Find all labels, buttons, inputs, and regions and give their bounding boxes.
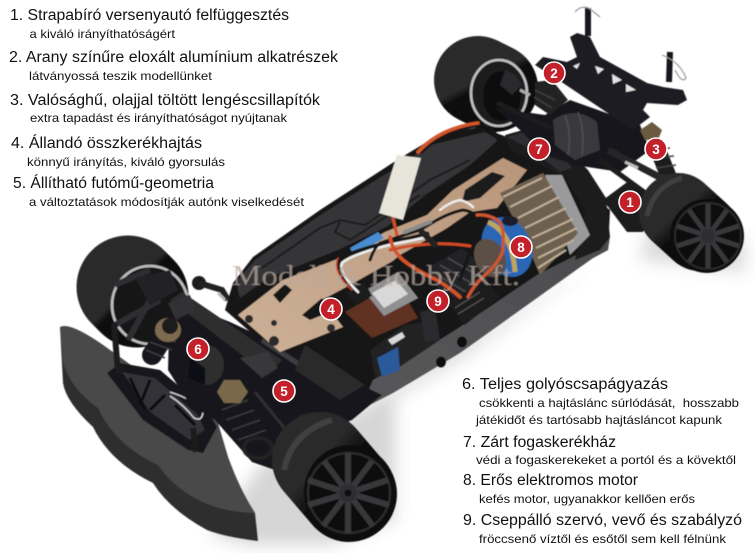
- front suspension assembly: [168, 276, 382, 470]
- front foam bumper: [60, 326, 258, 541]
- feature list: right: [462, 376, 742, 546]
- badge 1: [619, 191, 641, 213]
- front bumper mount plate: [107, 323, 217, 453]
- feature 3: [10, 92, 320, 125]
- feature 7: [463, 434, 736, 467]
- feature 5: 5. Állítható futómű-geometria: [13, 175, 214, 192]
- callout badges: [187, 62, 667, 402]
- feature 4: [11, 135, 225, 169]
- feature 5: [13, 175, 305, 209]
- feature 6: csökkenti a hajtáslánc súrlódását, hosszabb: [479, 397, 739, 410]
- badge 2: 2: [550, 66, 558, 81]
- badge 6: [187, 338, 209, 360]
- badge 2: [543, 62, 565, 84]
- feature 1: [10, 7, 289, 41]
- watermark: Modell & Hobby Kft.: [232, 261, 520, 292]
- feature 8: 8. Erős elektromos motor: [463, 472, 638, 489]
- copper top plate: [238, 158, 527, 352]
- badge 8: 8: [517, 240, 525, 255]
- feature 6: [462, 376, 739, 427]
- feature 4: 4. Állandó összkerékhajtás: [11, 135, 202, 152]
- feature 7: 7. Zárt fogaskerékház: [463, 434, 616, 451]
- feature 6: játékidőt és tartósabb hajtásláncot kapunk: [475, 414, 722, 427]
- rear shock tower: [535, 7, 687, 130]
- rear left wheel: [470, 59, 528, 127]
- receiver: [345, 272, 418, 338]
- feature 1: 1. Strapabíró versenyautó felfüggesztés: [10, 7, 289, 24]
- motor: [468, 209, 542, 285]
- badge 6: 6: [194, 342, 202, 357]
- feature 2: látványossá teszik modellünket: [29, 70, 213, 83]
- badge 9: [427, 290, 449, 312]
- feature list: left: [9, 7, 338, 209]
- feature 8: [463, 472, 695, 506]
- front left wheel: [110, 264, 190, 346]
- motor heat sink: [500, 173, 578, 275]
- badge 7: [528, 138, 550, 160]
- feature 4: könnyű irányítás, kiváló gyorsulás: [27, 156, 225, 169]
- badge 5: 5: [280, 384, 288, 399]
- rear right shock: [640, 122, 676, 175]
- speed controller: [427, 248, 500, 325]
- badge 8: [510, 236, 532, 258]
- feature 9: fröccsenő víztől és esőtől sem kell félnünk: [479, 533, 726, 546]
- badge 7: 7: [535, 142, 543, 157]
- badge 1: 1: [626, 195, 634, 210]
- gear cover: [505, 128, 610, 260]
- rear right wheel: [647, 178, 744, 273]
- feature 7: védi a fogaskerekeket a portól és a kövektől: [476, 454, 736, 467]
- feature 3: 3. Valósághű, olajjal töltött lengéscsillapítók: [10, 92, 320, 109]
- chassis tub: [225, 127, 610, 410]
- front right wheel: [284, 420, 396, 539]
- feature 5: a változtatások módosítják autónk viselkedését: [29, 196, 305, 209]
- feature 9: 9. Cseppálló szervó, vevő és szabályzó: [463, 512, 742, 529]
- rear differential and gearbox: [495, 80, 650, 172]
- badge 4: [320, 298, 342, 320]
- feature 6: 6. Teljes golyóscsapágyazás: [462, 376, 668, 393]
- battery and servo wires: [337, 123, 503, 297]
- badge 4: 4: [327, 302, 335, 317]
- rear suspension arms: [600, 150, 669, 232]
- electronics bay: [345, 215, 537, 380]
- battery connector: [379, 155, 421, 220]
- badge 5: [273, 380, 295, 402]
- feature 1: a kiváló irányíthatóságért: [30, 28, 176, 41]
- feature 3: extra tapadást és irányíthatóságot nyújtanak: [30, 112, 287, 125]
- badge 3: [645, 138, 667, 160]
- feature 9: [463, 512, 742, 546]
- ground shadow: [210, 220, 745, 545]
- servo: [370, 308, 440, 378]
- feature 2: [9, 49, 338, 83]
- front shock absorbers: [146, 318, 272, 458]
- badge 9: 9: [434, 294, 442, 309]
- feature 8: kefés motor, ugyanakkor kellően erős: [479, 493, 695, 506]
- chassis side wall: [360, 237, 610, 410]
- badge 3: 3: [652, 142, 660, 157]
- feature 2: 2. Arany színűre eloxált alumínium alkatrészek: [9, 49, 338, 66]
